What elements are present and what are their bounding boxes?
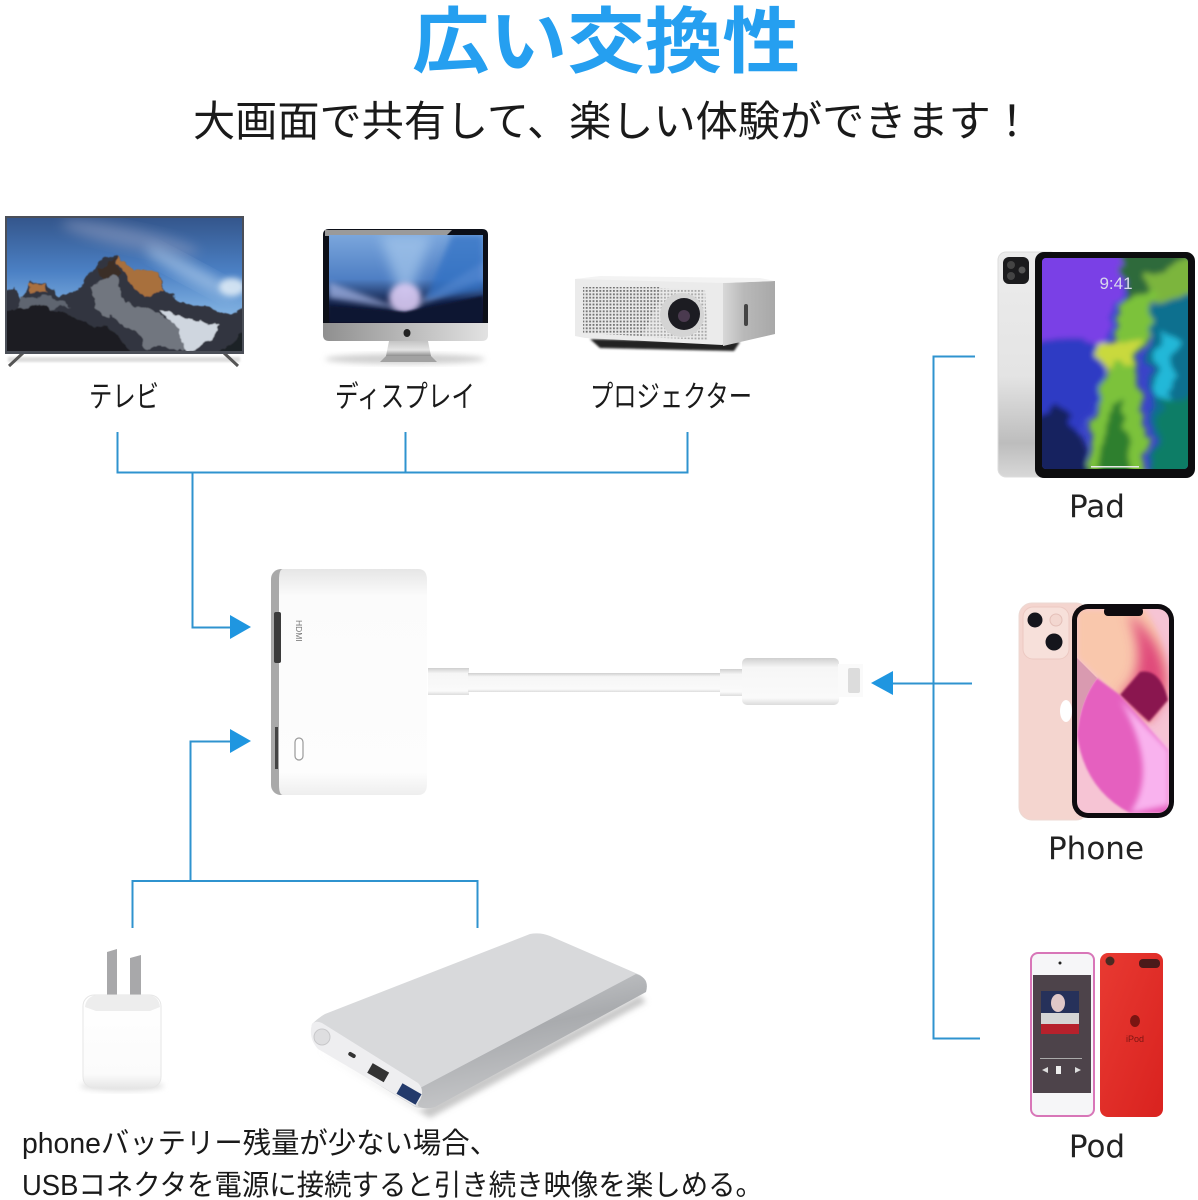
icon: music player: iPod (1126, 1034, 1144, 1044)
title: 広い交換性 (412, 3, 800, 83)
HDMI label: HDMI (294, 620, 304, 642)
Lightning plug (742, 658, 863, 705)
Lightning port symbol (295, 738, 303, 760)
label: Pad: Pad (1069, 489, 1125, 525)
connector lines: source devices (890, 356, 980, 1038)
caption (22, 1127, 763, 1200)
arrow: to HDMI port (230, 615, 251, 639)
icon: power bank (311, 933, 647, 1118)
connector lines: power inputs (132, 742, 478, 928)
adapter body (271, 569, 427, 795)
power port (275, 727, 278, 769)
cable (428, 668, 743, 696)
arrow: to Lightning plug (871, 671, 893, 695)
icon: projector (575, 276, 775, 351)
HDMI port (274, 612, 281, 663)
icon: power adapter (80, 949, 164, 1091)
icon: smartphone (1019, 603, 1174, 820)
label: ディスプレイ: ディスプレイ (335, 381, 475, 414)
label: Pod: Pod (1069, 1129, 1125, 1165)
subtitle: 大画面で共有して、楽しい体験ができます！ (193, 98, 1033, 145)
caption line 1: phoneバッテリー残量が少ない場合、 (22, 1127, 498, 1160)
icon: music player (1031, 953, 1163, 1117)
arrow: to power port (230, 729, 251, 753)
product: video adapter (271, 569, 863, 795)
icon: television (0, 214, 254, 366)
icon: tablet (998, 248, 1198, 480)
icon: desktop display (323, 229, 488, 364)
icon: tablet: 9:41 (1099, 274, 1133, 293)
apple logo mark (404, 329, 410, 337)
connector lines: display outputs (118, 432, 688, 628)
label: Phone: Phone (1048, 831, 1144, 867)
label: プロジェクター: プロジェクター (590, 381, 752, 414)
label: テレビ: テレビ (89, 381, 159, 414)
